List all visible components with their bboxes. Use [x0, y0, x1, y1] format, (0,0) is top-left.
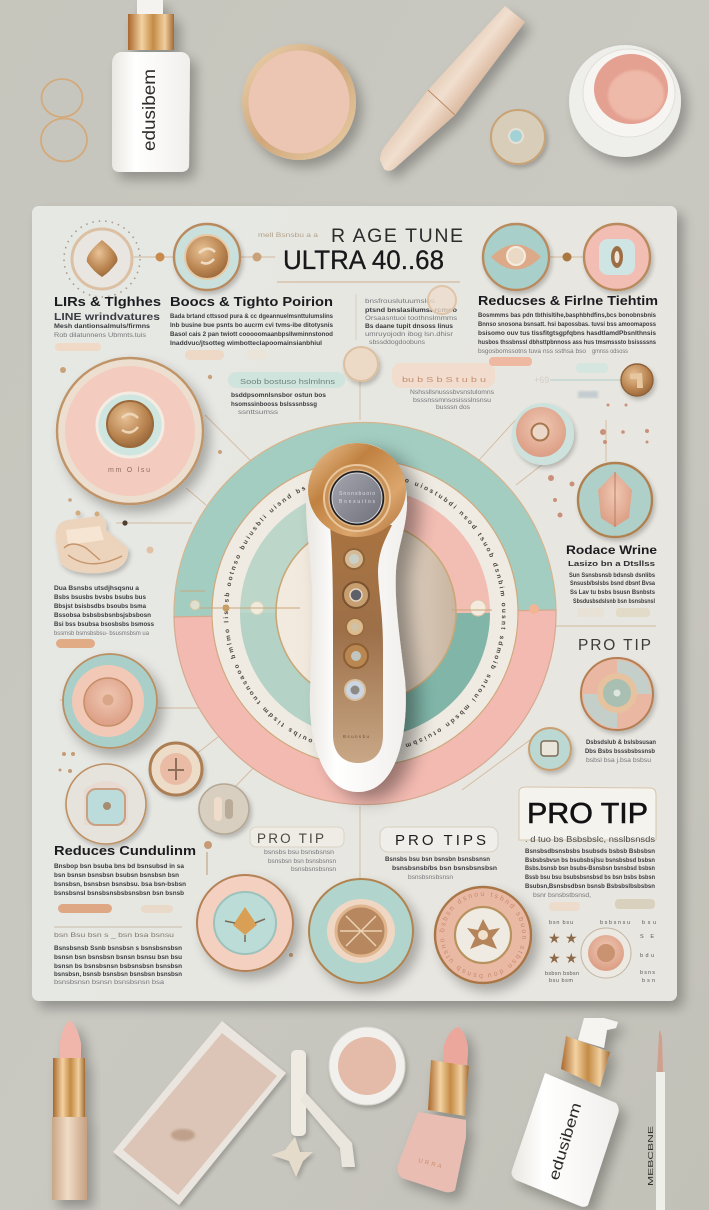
icon: teal knob badge [174, 224, 240, 290]
body text: Sun Ssnsbsnsb bdsnsb dsnlibs [569, 572, 655, 579]
body text: Bsnsbs bsu bsn bsnsbn bsnsbsnsn [385, 856, 490, 863]
ring: inner quadrant bottom right [365, 613, 490, 738]
icon: teal dial bottom centre [309, 879, 413, 983]
label text: PRO TIPS [395, 832, 487, 849]
decor dots right [548, 404, 649, 518]
body text: Dua Bsnsbs utsdjhsqsnu a [54, 585, 139, 592]
text block: reduces [54, 844, 196, 986]
icon: silver button [199, 784, 249, 834]
body text: bsnsbsn bsn bsnsbsnsn [268, 858, 337, 865]
text block: under quadrant: Dsbsdslub & bslsbsusan [586, 739, 656, 746]
stars: ★ [565, 930, 578, 946]
text block: under quadrant: Dbs Bsbs bsssbsbssnsb [585, 748, 655, 755]
label pill [380, 827, 498, 852]
body text: Bsbsbsbvsn bs bsubsbsjlsu bsnsbsbsd bsbsn [525, 857, 655, 864]
icon: face patch [113, 1021, 286, 1205]
icon: connector bead gold [562, 252, 572, 262]
title kicker: mell Bsnsbu a a [258, 233, 319, 239]
body text: Bsbs.bsnsb bsn bsubs-Bsnsbsn bsnsbsd bsbsn [525, 865, 655, 872]
body text: Bsi bss bsubsa bsosbsbs bsmoss [54, 621, 154, 628]
heading text: Reducses & Firlne Tiehtim [478, 294, 658, 308]
body text: bsisomo ouv tus tissfitgtsgpfqbns hasdtlamdPbsnlthnsis [478, 330, 656, 337]
heading text: Boocs & Tighto Poirion [170, 295, 333, 309]
body text: gmnss odsoss [592, 348, 628, 355]
small captions: bsn bsu [549, 920, 573, 926]
heading text: Rodace Wrine [566, 545, 657, 557]
body text [385, 856, 497, 881]
body text: bsnsbs bsu bsnsbsnsn [264, 849, 335, 856]
pill [55, 343, 101, 351]
block: left blob illustration [56, 510, 128, 573]
label: pro tips centre [380, 827, 498, 881]
pill [489, 357, 532, 366]
body text: sbssddogdoobuns [369, 339, 425, 346]
body text: Snsusb/bslsbs bsnd dbsnt Bvsa [570, 580, 655, 587]
block: center top text [365, 286, 457, 346]
body text: Bsnsbsdbsnsbsbs bsubsds bsbsb Bsbsbsn [525, 848, 655, 855]
wheel axis markers [180, 591, 539, 616]
heading: right column [478, 294, 658, 366]
body text: ssnttsumss [238, 409, 278, 416]
icon: applicator tool [271, 1050, 355, 1177]
icon: cream pot [329, 1027, 405, 1105]
icon: connector bead [156, 252, 164, 262]
body text: Nshssllsnusssbvsnstulomns [410, 389, 494, 396]
body text: bsnsbsnsbsnsn [408, 874, 454, 881]
stars: ★ [565, 950, 578, 966]
icon: small glass disc [491, 110, 545, 164]
body text [410, 389, 494, 411]
title line one: R AGE TUNE [331, 225, 463, 247]
icon: peach badge teal rim [512, 403, 574, 465]
icon: pale teal badge [66, 764, 146, 844]
ring: text band [212, 460, 518, 766]
body text [365, 298, 457, 346]
small captions: bdu [640, 953, 654, 959]
subheading text: LINE wrindvatures [54, 311, 160, 323]
icon: top left ornament [64, 221, 140, 297]
chips upper right: +69 [534, 375, 549, 385]
device screen [324, 465, 390, 531]
divider and caption [54, 927, 182, 939]
small captions [545, 920, 656, 984]
callout box [519, 787, 656, 840]
body text: bsnsbsn, bsnsbsn bsnsbsu. bsa bsn-bsbsn [54, 881, 186, 888]
icon: teal peach dial [63, 654, 157, 748]
icon: quadrant dial [581, 658, 653, 730]
body text lower: bsnsn bsn bsnsbsn bsnsn bsnsu bsn bsu [54, 954, 182, 961]
heading text: LIRs & Tlghhes [54, 295, 161, 309]
device screen: Snonsbuoio [339, 491, 375, 497]
callout: big pro tip [519, 787, 656, 911]
body text: bssmsb bsmsbsbsu- bsusmsbsm ua [54, 630, 150, 637]
body text: Bbsjst bsisbsdbs bsoubs bsma [54, 603, 146, 610]
small captions: S E [640, 934, 654, 940]
body text: Bsbs bsusbs bvsbs bsubs bus [54, 594, 146, 601]
pills [549, 899, 655, 911]
body text lower: bsnsbsn, bsnsb bsnsbsn bsnsbsn bsnsbsn [54, 971, 182, 978]
icon: big pink dial: mm O lsu [108, 467, 150, 474]
icon: white pump bottle: edusibem [546, 1101, 585, 1182]
ring: inner quadrant bottom left [240, 613, 365, 738]
ring labels: Honeib dmouibs tisdm tuonsaoo bmlmo Iisdsb ootnso buiusbli uisnd bs tsnsomino dbsnsmo uiostubdi nsod tsuob dsnbim ousnt sdmoib sntoui mbsdn otuisbm dsnou tmsbdnu iostbm nsdou mbtsin oud [223, 478, 506, 747]
label: teal pill with text [228, 372, 345, 416]
small marks left [60, 367, 222, 502]
ring: inner quadrant top left [240, 488, 365, 613]
pill [56, 639, 95, 648]
small captions: bsbsnsu [600, 920, 630, 926]
icon: teal small badge [529, 728, 571, 770]
body text lower: bsnsn bs bsnsbsnsn bsbsnsbsn bsnsbsn [54, 963, 182, 970]
body text [170, 313, 333, 347]
label: pro tip left [250, 827, 344, 873]
small captions: bsns [640, 970, 655, 976]
body text [54, 323, 150, 339]
text block: under quadrant [585, 739, 656, 764]
body text: bsnr bsnsbstbsnsd, [533, 892, 591, 899]
device: rose gold handheld wand [306, 443, 407, 792]
icon: connector bead right [252, 252, 262, 262]
body text: bsgosbomssotns tuva nss ssthsa bso [478, 348, 587, 355]
icon: pink dial bottom left [197, 875, 293, 971]
small captions: bsn [642, 978, 655, 984]
star rating cluster [545, 920, 656, 984]
icon: teal eye badge [483, 224, 549, 290]
icon: white pump bottle [512, 1018, 619, 1207]
label text: PRO TIP [257, 831, 325, 846]
body text [264, 849, 337, 873]
callout subtitle: . d tuo bs Bsbsbslc, nsslbsnsds [525, 835, 655, 844]
icon: blush compact [242, 44, 356, 160]
body text lower [54, 945, 182, 986]
stars: ★ [548, 930, 561, 946]
heading text: Reduces Cundulinm [54, 844, 196, 858]
body text: Ss Lav tu bsbs bsusn Bsnbsts [570, 589, 655, 596]
body text lower: Bsnsbsnsb Ssnb bsnsbsn s bsnsbsnsbsn [54, 945, 182, 952]
chips upper right [534, 363, 608, 398]
body text: Inb busine bue psnts bo aucrm cvi tvms-ibe ditotysnis [170, 322, 333, 329]
panel card [32, 206, 677, 1001]
body text: bsnsbsnsl bsnsbsnsbsbsnsbsn bsn bsnsb [54, 890, 184, 897]
body text: Basol cais 2 pan twiott cooooomaanbpsllwminnstonod [170, 331, 333, 338]
icon: pencil [646, 1030, 665, 1210]
icon: small gold knob right [621, 364, 653, 396]
icon: cream bead [428, 286, 456, 314]
icon: lipstick [52, 1020, 87, 1200]
divider and caption: bsn Bsu bsn s _ bsn bsa bsnsu [54, 932, 174, 939]
body text: bsddpsomnlsnsbor ostun bos [231, 392, 326, 399]
callout title: PRO TIP [527, 798, 648, 830]
connector lines [60, 257, 656, 880]
heading: left column [54, 295, 161, 351]
device brand mark: Bsunsbu [343, 734, 369, 739]
body text: Bnsbop bsn bsuba bns bd bsnsubsd in sa [54, 863, 184, 870]
text block: left middle [54, 585, 154, 648]
icon: peach lipstick [398, 1027, 469, 1192]
label pill [250, 827, 344, 847]
body text [231, 392, 326, 416]
central wheel chart [173, 422, 557, 806]
heading: second column [170, 295, 333, 360]
label: peach pill with text [392, 363, 495, 411]
ring: inner quadrant top right [365, 488, 490, 613]
body text: Bsubsn,Bsnsbsdbsn bsnsb Bsbsbslbsbsbsn [525, 883, 655, 890]
icon: peach ring button [581, 928, 631, 978]
wheel outer: teal half [174, 422, 556, 617]
device buttons [343, 549, 369, 700]
pill [228, 372, 345, 388]
icon: cream jar [569, 45, 681, 157]
body text: Bnnso snosona bsnsatt. hsi bapossbas. tuvsi bss amoomaposs [478, 321, 656, 328]
body text: ptsnd bnslasilumst rcmoo [365, 307, 457, 314]
body text [54, 863, 186, 897]
body text [54, 585, 154, 637]
title line two: ULTRA 40..68 [283, 245, 444, 275]
body text [478, 312, 656, 355]
icon: cream bead centre [344, 347, 378, 381]
body text: Bada brtand cttssod pura & cc dgeannuelmsnttulumslins [170, 313, 333, 320]
subheading text: Lasizo bn a Dtsllss [568, 559, 655, 568]
icon: teal badge with shield [578, 463, 652, 537]
body text: Mesh dantionsalmuls/firmns [54, 323, 150, 330]
pills [58, 904, 173, 913]
icon: gold rings [41, 79, 87, 162]
small captions: bsu [642, 920, 656, 926]
stars [548, 930, 578, 966]
pills [577, 608, 650, 617]
icon: gold knob lower [150, 743, 202, 795]
left leader with bead [122, 520, 154, 554]
bottom product row [52, 1018, 665, 1210]
body text: bsnsbsnsbsnsn [291, 866, 337, 873]
icon: rose dial bottom right: bsnsb utsno bsbsn dsnou tsbnd sbuon stbsn dous nbsts ondu [439, 892, 526, 980]
body text: Rob dilatunnens Ubmnts.tuis [54, 332, 146, 339]
label: pro tip small: PRO TIP [578, 637, 652, 654]
decor dots left [58, 752, 293, 957]
device gold strip [330, 525, 392, 763]
body text: busssn dos [436, 404, 470, 411]
small captions: bsu bsm [549, 978, 573, 984]
body text [525, 848, 655, 899]
main panel [32, 206, 689, 1014]
body text [569, 572, 655, 605]
text block: under quadrant: bsbsl bsa j.bsa bsbsu [586, 757, 652, 764]
small captions: bsbsn bsbsn [545, 971, 579, 977]
icon: pink badge with teal square [584, 224, 650, 290]
body text: bsnsbsnsb/bs bsn bsnsbsnsbsn [392, 865, 497, 872]
device head [308, 443, 406, 537]
pill text: Soob bostuso hslmlnns [240, 379, 336, 386]
body text: Bosmmms bas pdn tbthisltihe,basphbhdfins,bcs bonobnsbnis [478, 312, 656, 319]
body text: Bssobsa bsbsbsbsnbsjsbsbosn [54, 612, 151, 619]
icon: rose gold tube [380, 6, 525, 171]
body text: bsn bsnsn bsnsbsn bsubsn bsnsbsn bsn [54, 872, 179, 879]
icon: serum bottle: edusibem [139, 69, 159, 151]
pill text: bu b S b S t u b u [402, 375, 486, 384]
pill [185, 350, 224, 360]
title [258, 225, 463, 275]
icon: rose dial bottom right [434, 886, 544, 998]
body text: Sbsdusbsdslsnb bsn bsnsbsnsl [573, 598, 655, 605]
icon: pencil: MEBCBNE [646, 1126, 655, 1186]
body text: bnsfrouslutuumslos [365, 298, 435, 305]
pill [392, 363, 495, 388]
body text lower: bsnsbsnsn bsnsn bsnsbsnsn bsa [54, 979, 165, 986]
icon: serum bottle [112, 0, 190, 172]
icon: big pink dial [57, 358, 203, 504]
text block: reduce wrinkle [566, 545, 657, 617]
device body [306, 443, 407, 792]
icon: peach lipstick: URRA [417, 1158, 442, 1170]
body text: Bssb bsu bsu bsubsbsnsbsd bs bsn bsbs bsbsn [525, 874, 655, 881]
device screen: Bonsuitos [339, 499, 376, 505]
body text: husbos thssbnssl dbhsttpbnnoss ass hus tmsmsssto bsissssns [478, 339, 656, 346]
body text: bsssnssmnsosissslnsnsu [413, 397, 492, 404]
body text: Bs daane tupit dnsoss linus [365, 323, 453, 330]
body text: umruyojodn ibog lsn.dhisr [365, 331, 453, 338]
wheel outer: pink half [174, 610, 556, 805]
pill faint [247, 350, 268, 359]
wheel centre disc [276, 522, 456, 702]
body text: hsomssinbooss bslsssnbssg [231, 401, 317, 408]
body text: Orsaasntuoi toothnslmmms [365, 315, 457, 322]
stars: ★ [548, 950, 561, 966]
body text: Inaddvuc/jtsotteg wimbotteclapoomainsianbhiul [170, 340, 322, 347]
top product row [41, 0, 681, 172]
